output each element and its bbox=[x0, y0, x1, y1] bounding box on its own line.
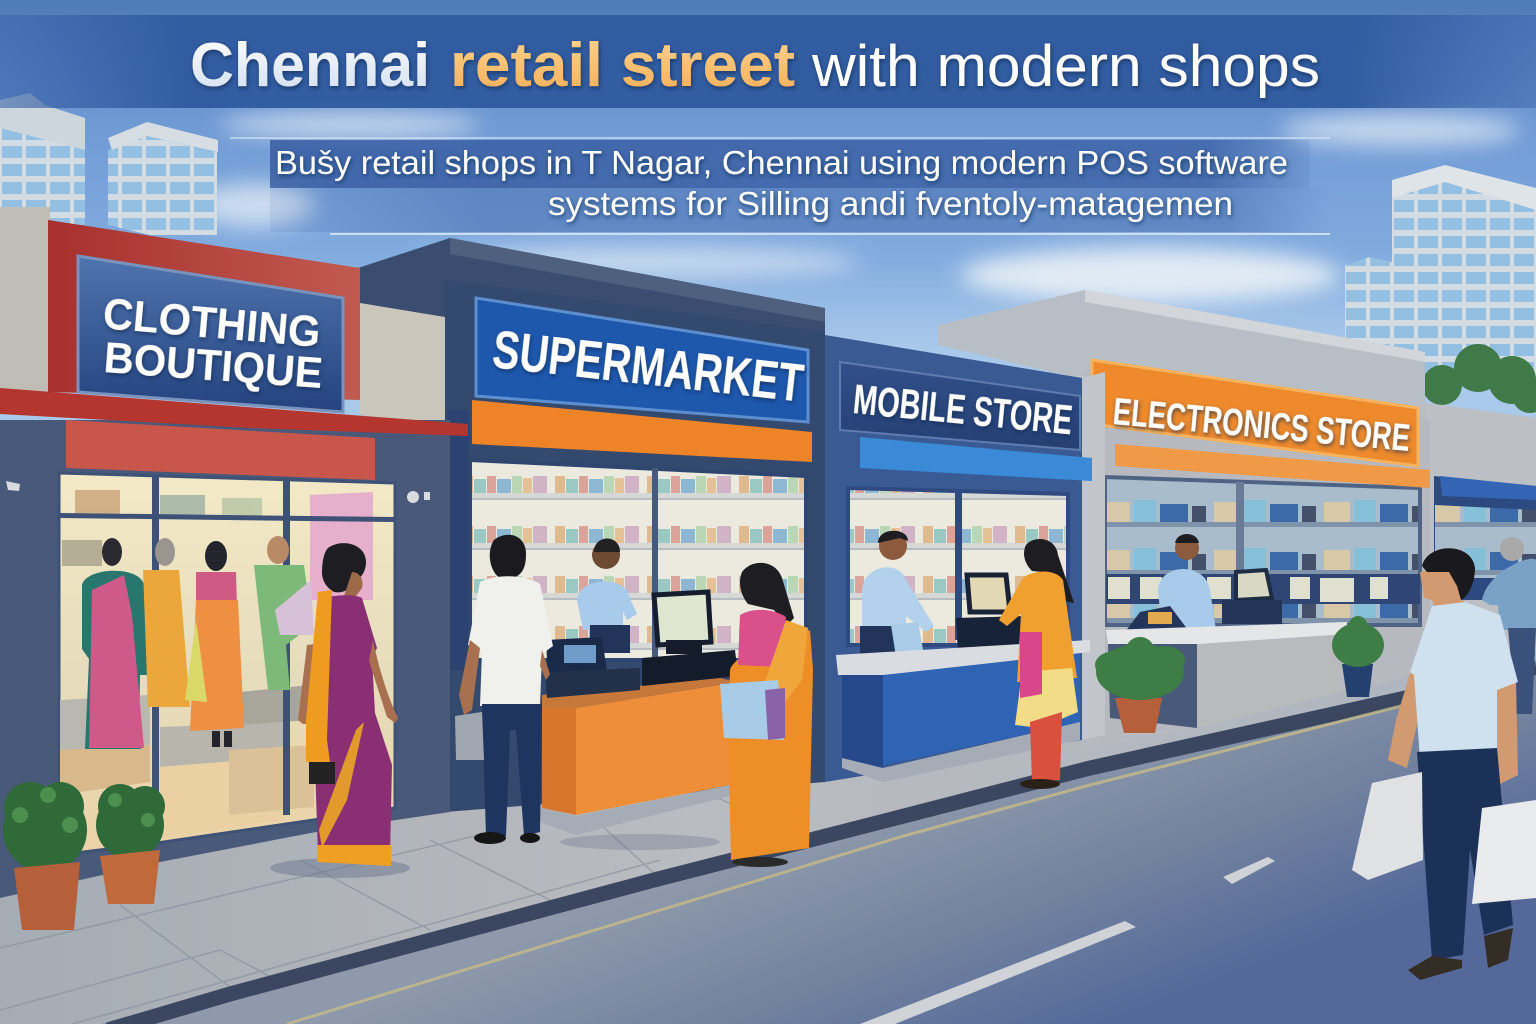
person: back view far right bbox=[1482, 537, 1536, 714]
mobile window bbox=[848, 488, 1068, 645]
subtitle text: systems for Silling andi fventoly-matagemen bbox=[548, 185, 1233, 222]
POS mobile bbox=[956, 575, 1025, 652]
tree right bbox=[1422, 344, 1536, 413]
woman: yellow top bbox=[999, 539, 1078, 789]
plant pots left bbox=[3, 782, 165, 930]
far right shop bbox=[1420, 402, 1536, 676]
supermarket sign bbox=[476, 298, 808, 422]
subtitle text: Bušy retail shops in T Nagar, Chennai using modern POS software bbox=[275, 144, 1288, 181]
cashier supermarket bbox=[577, 538, 637, 653]
mannequin: orange dress bbox=[143, 538, 190, 707]
cashier electronics bbox=[1158, 534, 1216, 630]
POS supermarket bbox=[545, 592, 738, 698]
man: foreground with bags bbox=[1352, 548, 1536, 980]
shop: clothing boutique bbox=[0, 207, 468, 898]
supermarket counter bbox=[540, 678, 735, 835]
mobile counter bbox=[836, 640, 1090, 782]
plant: middle fern bbox=[1095, 637, 1185, 733]
electronics sign: ELECTRONICS STORE bbox=[1111, 391, 1412, 460]
electronics window bbox=[1105, 477, 1420, 625]
shop: supermarket bbox=[358, 238, 825, 835]
road markings bbox=[860, 921, 1136, 1024]
boutique sign: CLOTHING bbox=[101, 289, 323, 357]
title: with modern shops: with modern shops bbox=[811, 34, 1320, 99]
POS electronics bbox=[1125, 570, 1282, 632]
title: Chennai: Chennai bbox=[190, 31, 430, 100]
shop: electronics store bbox=[938, 290, 1430, 750]
title band bbox=[0, 15, 1536, 108]
woman: purple saree bbox=[298, 543, 398, 866]
supermarket sign: SUPERMARKET bbox=[490, 319, 806, 414]
boutique sign: BOUTIQUE bbox=[102, 333, 324, 398]
woman: orange saree bbox=[720, 563, 813, 867]
mobile awning bbox=[860, 437, 1092, 481]
electronics sign bbox=[1092, 360, 1418, 466]
supermarket awning bbox=[472, 400, 812, 462]
display screens bbox=[1106, 574, 1420, 604]
shop: mobile store bbox=[825, 335, 1105, 782]
mobile sign: MOBILE STORE bbox=[851, 375, 1075, 443]
supermarket window bbox=[470, 460, 806, 660]
mobile sign bbox=[840, 362, 1080, 450]
plant: right fern bbox=[1332, 616, 1384, 697]
sidewalk bbox=[0, 620, 1536, 1024]
mannequin: coral dress bbox=[185, 541, 244, 747]
cashier mobile bbox=[860, 531, 934, 657]
title: retail street: retail street bbox=[450, 31, 795, 100]
mannequin: pink saree bbox=[82, 538, 148, 749]
background buildings right bbox=[1345, 165, 1536, 380]
subtitle band bbox=[230, 137, 1330, 235]
background buildings left bbox=[0, 93, 218, 235]
electronics awning bbox=[1115, 444, 1430, 488]
road bbox=[100, 660, 1536, 1024]
boutique window bbox=[59, 473, 395, 855]
boutique awning bbox=[0, 388, 468, 480]
boutique sign bbox=[78, 256, 343, 412]
mannequin: green dress bbox=[254, 536, 314, 690]
man: white shirt bbox=[455, 535, 553, 844]
electronics counter bbox=[1106, 622, 1347, 728]
cctv icons bbox=[6, 481, 430, 503]
